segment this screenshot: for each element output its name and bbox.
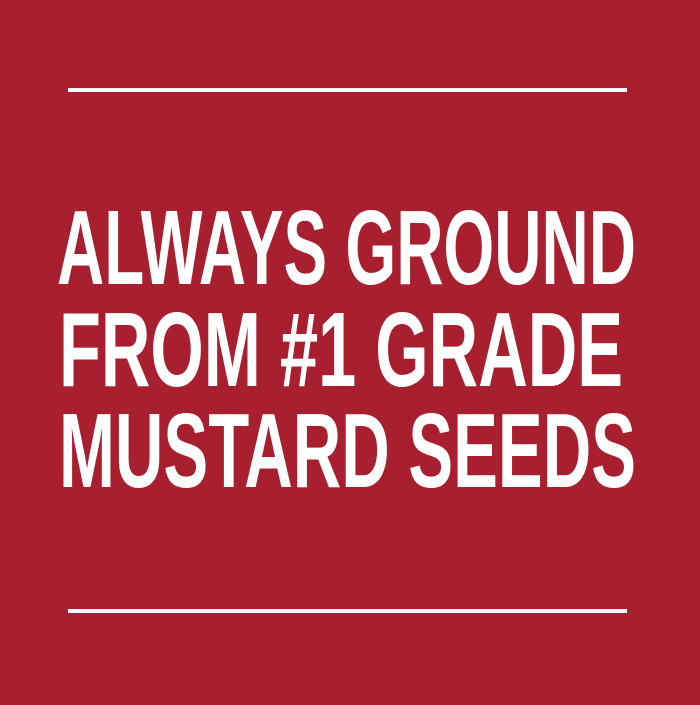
headline [57,189,636,510]
